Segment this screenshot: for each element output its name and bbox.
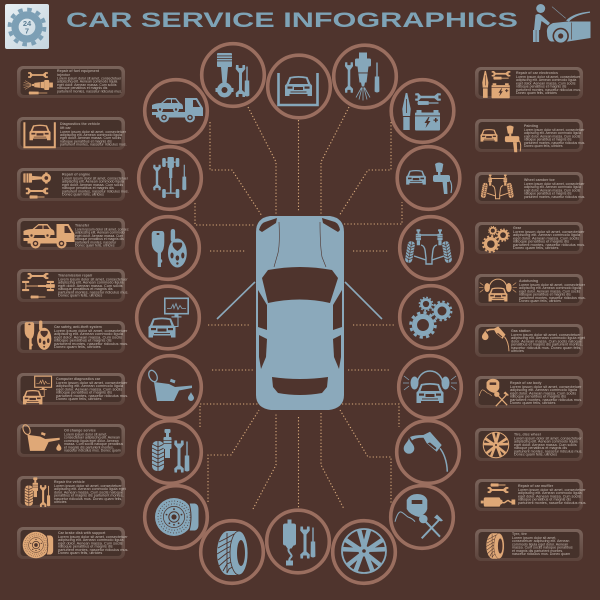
panel: car brake disk with support: natoque penatibus et magnis dis <box>58 545 113 549</box>
panel: computer diagnostics car: Lorem ipsum dolor sit amet, consectetuer <box>56 380 127 385</box>
panel: painting: Lorem ipsum dolor sit amet, consectetuer <box>524 128 584 132</box>
panel: repair of car body: Lorem ipsum dolor sit amet, consectetuer <box>510 384 581 389</box>
ring: tyre <box>201 521 263 583</box>
panel: repair of engine: natoque penatibus et magnis dis <box>62 186 114 190</box>
panel: repair the vehicle: Repair the vehicle <box>54 480 85 484</box>
panel: gas station: dolor. Aenean massa. Cum sociis natoque <box>511 339 582 343</box>
panel: repair of fuel injector: natoque penatibus et magnis dis <box>57 86 108 90</box>
panel: wheel camber toe: Wheel camber toe <box>524 178 555 182</box>
panel: car safety, anti-theft system: parturient montes, nascetur ridiculus mus. <box>54 341 128 346</box>
ring: auto tuning speakers <box>399 356 461 418</box>
panel: diagnostics the vehicle lift car: natoque penatibus et magnis dis <box>60 139 112 143</box>
panel: repair of engine: Lorem ipsum dolor sit amet, consectetuer <box>62 176 128 180</box>
panel: gas station: nascetur ridiculus mus. Donec quam felis, <box>511 346 581 350</box>
panel: repair of car muffler: adipiscing elit. Aenean commodo ligula <box>518 491 582 495</box>
panel: repair of car muffler: natoque penatibus et magnis dis <box>518 498 571 502</box>
panel: painting: adipiscing elit. Aenean commodo ligula <box>524 131 581 135</box>
panel: tyre, tire: et magnis dis parturient montes, <box>512 549 563 553</box>
panel: repair of engine <box>17 168 129 201</box>
panel: transmission repair <box>17 269 128 302</box>
ring: tyre, shock absorber and tools <box>139 421 201 483</box>
panel: repair of fuel injector <box>17 66 125 98</box>
panel: tyre, tire: consectetuer adipiscing elit. Aenean <box>512 539 569 543</box>
panel: diagnostics the vehicle lift car: eget dolor. Aenean massa. Cum sociis <box>60 136 121 140</box>
panel: gear: adipiscing elit. Aenean commodo ligula <box>513 232 581 237</box>
panel: diagnostics the vehicle lift car: lift car <box>60 126 71 130</box>
panel: oil change service: nascetur ridiculus mus. Donec quam <box>64 448 121 452</box>
panel: repair of car body: Donec quam felis, ultricies <box>510 400 555 405</box>
panel: repair the vehicle: dolor. Aenean massa. Cum sociis natoque <box>54 490 123 494</box>
panel: transfer <box>17 218 129 250</box>
ring: alloy wheel <box>333 521 395 583</box>
icon: 24/7 gear badge: 24 <box>23 19 32 28</box>
panel: oil change service: consectetuer adipiscing elit. Aenean <box>64 436 120 440</box>
panel: repair of car electronics: Donec quam felis, ultricies <box>516 91 557 95</box>
panel: gear <box>475 222 585 254</box>
panel: transmission repair: Transmission repair <box>58 274 93 278</box>
dotted connector lines <box>195 107 402 509</box>
ring: welding mask and hammers <box>391 486 453 548</box>
panel: repair of car electronics <box>475 67 583 99</box>
panel: gear: natoque penatibus et magnis dis <box>513 239 569 244</box>
panel: repair of car electronics: Repair of car electronics <box>516 71 558 75</box>
panel: car brake disk with support: eget dolor. Aenean massa. Cum sociis <box>58 541 123 545</box>
panel: autotuning <box>475 274 586 306</box>
panel: car safety, anti-theft system <box>17 321 128 353</box>
panel: tire, disc wheel: adipiscing elit. Aenean commodo ligula <box>514 440 578 444</box>
panel: painting: Donec quam felis, ultricies <box>524 144 563 148</box>
ring: fuel nozzle <box>397 421 459 483</box>
panel: car safety, anti-theft system: Car safety, anti-theft system <box>54 325 102 329</box>
ring: fuel injector and tools <box>334 45 396 108</box>
panel: transmission repair: parturient montes, nascetur ridiculus mus. <box>58 290 128 294</box>
ring: oil can <box>139 356 201 418</box>
panel: repair of car electronics: Lorem ipsum dolor sit amet, consectetuer <box>516 75 580 79</box>
panel: diagnostics the vehicle lift car: Diagnostics the vehicle <box>60 122 100 126</box>
ring: car painting spray gun <box>397 147 460 209</box>
panel: transmission repair: eget dolor. Aenean massa. Cum sociis <box>58 284 123 288</box>
panel: repair of car muffler <box>475 479 586 511</box>
panel: gear: eget dolor. Aenean massa. Cum sociis <box>513 235 579 240</box>
ring: tow truck <box>145 80 207 142</box>
panel: oil change service: Lorem ipsum dolor sit amet, <box>64 432 107 436</box>
panel: diagnostics the vehicle lift car <box>17 117 127 150</box>
panel: painting: natoque penatibus et magnis dis <box>524 138 572 142</box>
panel: repair of engine: eget dolor. Aenean massa. Cum sociis <box>62 183 123 187</box>
panel: transfer: Donec quam felis, ultricies <box>75 244 115 248</box>
panel: autotuning: adipiscing elit. Aenean commodo ligula <box>519 286 581 290</box>
panel: transmission repair: adipiscing elit. Aenean commodo ligula <box>58 281 124 285</box>
panel: repair of car body <box>475 376 583 408</box>
ring: car on lift <box>268 55 330 118</box>
panel: transfer: adipiscing elit. Aenean commodo <box>75 231 125 235</box>
panel: wheel camber toe: eget dolor. Aenean massa. Cum sociis <box>524 188 580 192</box>
panel: repair of car muffler: Repair of car muffler <box>518 484 554 488</box>
panel: tyre, tire: Tyre, tire <box>512 532 527 536</box>
panel: tyre, tire <box>475 529 583 561</box>
panel: gas station <box>475 324 586 357</box>
panel: computer diagnostics car: Donec quam felis, ultricies <box>56 396 101 401</box>
ring: engine piston and tools <box>202 44 264 106</box>
panel: repair of car electronics: eget dolor. Aenean massa. Cum sociis <box>516 81 576 85</box>
panel: tire, disc wheel: Tire, disc wheel <box>514 432 541 436</box>
panel: computer diagnostics car: adipiscing elit. Aenean commodo ligula <box>56 383 124 388</box>
icon: central car top view <box>217 216 382 410</box>
panel: gas station: Gas station <box>511 329 531 333</box>
panel: repair of car body: eget dolor. Aenean massa. Cum sociis <box>510 390 576 395</box>
panel: repair the vehicle: adipiscing elit. Aenean commodo ligula eget <box>54 487 126 491</box>
panel: tire, disc wheel: natoque penatibus et magnis dis <box>514 446 567 450</box>
panel: gas station: ultricies <box>511 349 524 353</box>
panel: repair of fuel injector: parturient montes, nascetur ridiculus mus. <box>57 89 122 93</box>
panel: painting: Painting <box>524 124 538 128</box>
panel: repair the vehicle: penatibus et magnis dis parturient montes, <box>54 494 124 498</box>
panel: transmission repair: Donec quam felis, ultricies <box>58 294 102 298</box>
panel: repair of fuel injector: injector <box>57 73 71 77</box>
panel: transfer: parturient montes, nascetur <box>75 240 117 244</box>
panel: car brake disk with support: adipiscing elit. Aenean commodo ligula <box>58 538 124 542</box>
panel: repair of car muffler: parturient montes, nascetur ridiculus mus. <box>518 501 586 505</box>
panel: tire, disc wheel: Donec quam felis, ultricies <box>514 452 557 456</box>
icon: mechanic at open car <box>533 4 590 44</box>
panel: computer diagnostics car: eget dolor. Aenean massa. Cum sociis <box>56 386 122 391</box>
ring: car key and alarm remote <box>137 217 199 279</box>
panel: gear: Donec quam felis, ultricies <box>513 245 558 250</box>
panel: repair of car body: natoque penatibus et magnis dis <box>510 394 566 399</box>
panel: computer diagnostics car: Computer diagnostics car <box>56 377 101 381</box>
panel: autotuning: natoque penatibus et magnis dis <box>519 293 571 297</box>
panel: car safety, anti-theft system: Donec quam felis, ultricies <box>54 344 101 349</box>
panel: diagnostics the vehicle lift car: Lorem ipsum dolor sit amet, consectetuer <box>60 130 126 134</box>
panel: tyre, tire: massa. Cum sociis natoque penatibus <box>512 546 573 550</box>
panel: oil change service: commodo ligula eget dolor. Aenean <box>64 439 119 443</box>
panel: tire, disc wheel: eget dolor. Aenean massa. Cum sociis <box>514 443 577 447</box>
panel: repair of car body: adipiscing elit. Aenean commodo ligula <box>510 387 578 392</box>
panel: gas station: Lorem ipsum dolor sit amet, consectetuer <box>511 333 581 337</box>
ring: steering and suspension <box>139 147 201 209</box>
panel: tire, disc wheel: Lorem ipsum dolor sit amet, consectetuer <box>514 436 582 440</box>
panel: repair of car electronics: natoque penatibus et magnis dis <box>516 85 567 89</box>
panel: transfer: natoque penatibus et magnis dis <box>75 237 124 241</box>
panel: car brake disk with support: Donec quam felis, ultricies <box>58 551 102 555</box>
panel: gear: Gear <box>513 226 522 230</box>
panel: repair of fuel injector: Lorem ipsum dolor sit amet, consectetuer <box>57 76 121 80</box>
panel: repair of car muffler: eget dolor. Aenean massa. Cum sociis <box>518 494 581 498</box>
panel: gas station: penatibus et magnis dis parturient montes, <box>511 343 583 347</box>
panel: repair of engine: adipiscing elit. Aenean commodo ligula <box>62 180 124 184</box>
panel: oil change service: massa. Cum sociis natoque penatibus <box>64 442 123 446</box>
panel: transmission repair: natoque penatibus et magnis dis <box>58 287 113 291</box>
icon: 24/7 gear badge: 7 <box>25 26 29 36</box>
panel: car safety, anti-theft system: eget dolor. Aenean massa. Cum sociis <box>54 334 122 339</box>
panel: repair of engine: parturient montes, nascetur ridiculus mus. <box>62 189 129 193</box>
panel: painting: eget dolor. Aenean massa. Cum sociis <box>524 134 580 138</box>
panel: autotuning: Autotuning <box>519 279 538 283</box>
panel: autotuning: Lorem ipsum dolor sit amet, consectetuer <box>519 283 585 287</box>
ring: battery and clamp <box>391 80 454 142</box>
panel: repair of fuel injector: Repair of fuel equipment <box>57 69 100 73</box>
ring: wheel camber <box>400 217 462 279</box>
panel: repair the vehicle: Lorem ipsum dolor sit amet, consectetuer <box>54 484 122 488</box>
panel: car brake disk with support: Lorem ipsum dolor sit amet, consectetuer <box>58 535 128 539</box>
panel: computer diagnostics car: natoque penatibus et magnis dis <box>56 390 112 395</box>
panel: autotuning: eget dolor. Aenean massa. Cum sociis <box>519 289 580 293</box>
panel: transmission repair: Lorem ipsum dolor sit amet, consectetuer <box>58 278 128 282</box>
panel: wheel camber toe <box>475 172 585 204</box>
panel: repair of car electronics: parturient montes, nascetur ridiculus mus. <box>516 88 581 92</box>
panel: painting: parturient montes, nascetur ridiculus mus. <box>524 141 585 145</box>
ring: brake disc <box>145 486 207 548</box>
panel: gear: parturient montes, nascetur ridiculus mus. <box>513 242 585 247</box>
panel: autotuning: parturient montes, nascetur ridiculus mus. <box>519 296 586 300</box>
panel: car safety, anti-theft system: adipiscing elit. Aenean commodo ligula <box>54 331 124 336</box>
panel: tyre, tire: Lorem ipsum dolor sit amet, <box>512 536 556 540</box>
icon: 24/7 gear badge <box>5 4 49 49</box>
panel: oil change service: Oil change service <box>64 428 96 432</box>
panel: car safety, anti-theft system: natoque penatibus et magnis dis <box>54 338 112 343</box>
panel: repair of car body: Repair of car body <box>510 381 542 385</box>
panel: tyre, tire: commodo ligula eget dolor. Aenean <box>512 542 568 546</box>
panel: computer diagnostics car: parturient montes, nascetur ridiculus mus. <box>56 393 128 398</box>
panel: wheel camber toe: natoque penatibus et magnis dis <box>524 192 572 196</box>
panel: repair the vehicle: ultricies <box>54 500 67 504</box>
panel: car brake disk with support <box>17 527 128 559</box>
panel: gas station: adipiscing elit. Aenean commodo ligula eget <box>511 336 586 340</box>
ring: computer diagnostics <box>137 286 199 349</box>
panel: gear: Lorem ipsum dolor sit amet, consectetuer <box>513 229 584 234</box>
panel: repair of fuel injector: adipiscing elit. Aenean commodo ligula <box>57 80 117 84</box>
panel: oil change service: et magnis dis parturient montes, <box>64 445 114 449</box>
panel: transfer: Lorem ipsum dolor sit amet, consec <box>75 228 129 232</box>
panel: transfer: Transfer <box>75 224 90 228</box>
panel: painting <box>475 119 585 152</box>
panel: autotuning: Donec quam felis, ultricies <box>519 299 561 303</box>
panel: repair of fuel injector: eget dolor. Aenean massa. Cum sociis <box>57 83 117 87</box>
panel: wheel camber toe: parturient montes, nascetur ridiculus mus. <box>524 195 585 199</box>
panel: tire, disc wheel: parturient montes, nascetur ridiculus mus. <box>514 449 582 453</box>
ring: muffler and tools <box>267 510 329 573</box>
panel: transfer: eget dolor. Aenean massa. Cum <box>75 234 123 238</box>
panel: wheel camber toe: Lorem ipsum dolor sit amet, consectetuer <box>524 182 584 186</box>
panel: repair of engine: Repair of engine <box>62 172 90 176</box>
panel: car brake disk with support: Car brake disk with support <box>58 531 106 535</box>
panel: tire, disc wheel <box>475 428 583 461</box>
panel: repair of car electronics: adipiscing elit. Aenean commodo ligula <box>516 78 576 82</box>
panel: diagnostics the vehicle lift car: parturient montes, nascetur ridiculus mus. <box>60 142 127 146</box>
panel: repair of engine: Donec quam felis, ultricies <box>62 192 104 196</box>
panel: repair of car body: parturient montes, nascetur ridiculus mus. <box>510 397 582 402</box>
panel: repair the vehicle: nascetur ridiculus mus. Donec quam felis, <box>54 497 122 501</box>
ring: gears <box>400 286 462 348</box>
panel: tyre, tire: nascetur ridiculus mus. Donec quam <box>512 552 570 556</box>
panel: car safety, anti-theft system: Lorem ipsum dolor sit amet, consectetuer <box>54 328 127 333</box>
panel: oil change service <box>17 424 125 457</box>
panel: repair the vehicle <box>17 476 126 508</box>
panel: wheel camber toe: adipiscing elit. Aenean commodo ligula <box>524 185 581 189</box>
panel: computer diagnostics car <box>17 373 128 405</box>
title: CAR SERVICE INFOGRAPHICS <box>66 9 518 32</box>
panel: car brake disk with support: parturient montes, nascetur ridiculus mus. <box>58 548 128 552</box>
panel: repair of car muffler: Lorem ipsum dolor sit amet, consectetuer <box>518 488 586 492</box>
panel: diagnostics the vehicle lift car: adipiscing elit. Aenean commodo ligula <box>60 133 122 137</box>
